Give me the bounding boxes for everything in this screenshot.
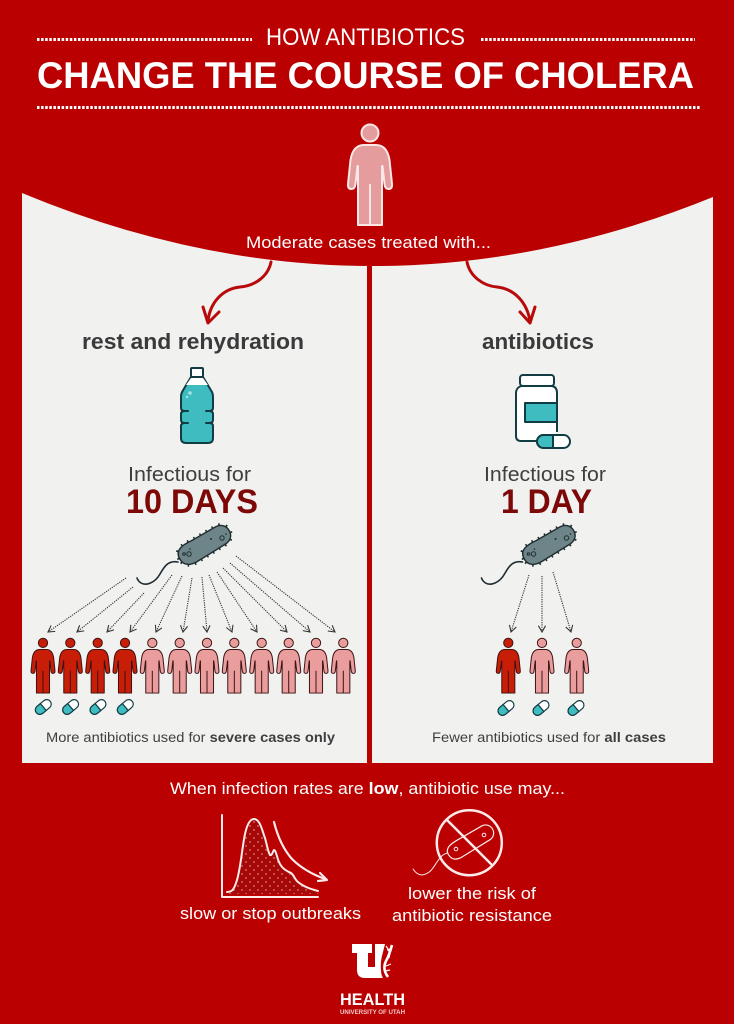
title line one: HOW ANTIBIOTICS	[266, 24, 465, 51]
dotted rule right	[481, 38, 695, 41]
arrow: to antibiotics	[467, 262, 535, 323]
pills right	[496, 699, 586, 717]
icon: water bottle	[181, 368, 213, 443]
title line two: CHANGE THE COURSE OF CHOLERA	[37, 55, 694, 96]
logo: University of Utah Health	[340, 944, 405, 1016]
arrow: to rest and rehydration	[203, 262, 271, 323]
intro text: Moderate cases treated with...	[246, 234, 491, 252]
label: infectious right: Infectious for	[484, 464, 606, 486]
panel divider	[367, 260, 372, 763]
label: lower the risk: lower the risk of	[408, 885, 536, 903]
pills left	[34, 698, 135, 716]
dotted arrows left	[48, 556, 335, 632]
icon: pill bottle	[516, 375, 570, 448]
people row left	[31, 638, 355, 693]
chart: epidemic curve	[222, 815, 327, 897]
icon: bacterium left	[137, 522, 235, 584]
bottom heading: When infection rates are low, antibiotic use may...	[170, 780, 565, 798]
dotted rule lower	[37, 106, 701, 109]
heading: antibiotics: antibiotics	[482, 329, 594, 354]
logo word: HEALTH	[340, 990, 405, 1009]
caption left: More antibiotics used for severe cases only	[46, 730, 336, 745]
logo subtitle: UNIVERSITY OF UTAH	[340, 1009, 405, 1016]
icon: no bacteria	[413, 810, 502, 875]
caption right: Fewer antibiotics used for all cases	[432, 730, 666, 745]
icon: bacterium right	[482, 522, 579, 584]
people row right	[496, 638, 589, 693]
label: 10 days: 10 DAYS	[126, 483, 258, 521]
heading: rest and rehydration: rest and rehydration	[82, 329, 304, 354]
title	[37, 24, 701, 108]
label: 1 day: 1 DAY	[501, 483, 592, 521]
panels: treatment comparison	[22, 193, 713, 763]
label: infectious left: Infectious for	[128, 464, 251, 486]
dotted arrows right	[511, 572, 571, 632]
dotted rule left	[37, 38, 252, 41]
icon: person	[348, 124, 392, 225]
label: slow or stop outbreaks: slow or stop outbreaks	[180, 905, 361, 923]
label: antibiotic resistance: antibiotic resistance	[392, 907, 552, 925]
logo mark	[352, 944, 392, 978]
